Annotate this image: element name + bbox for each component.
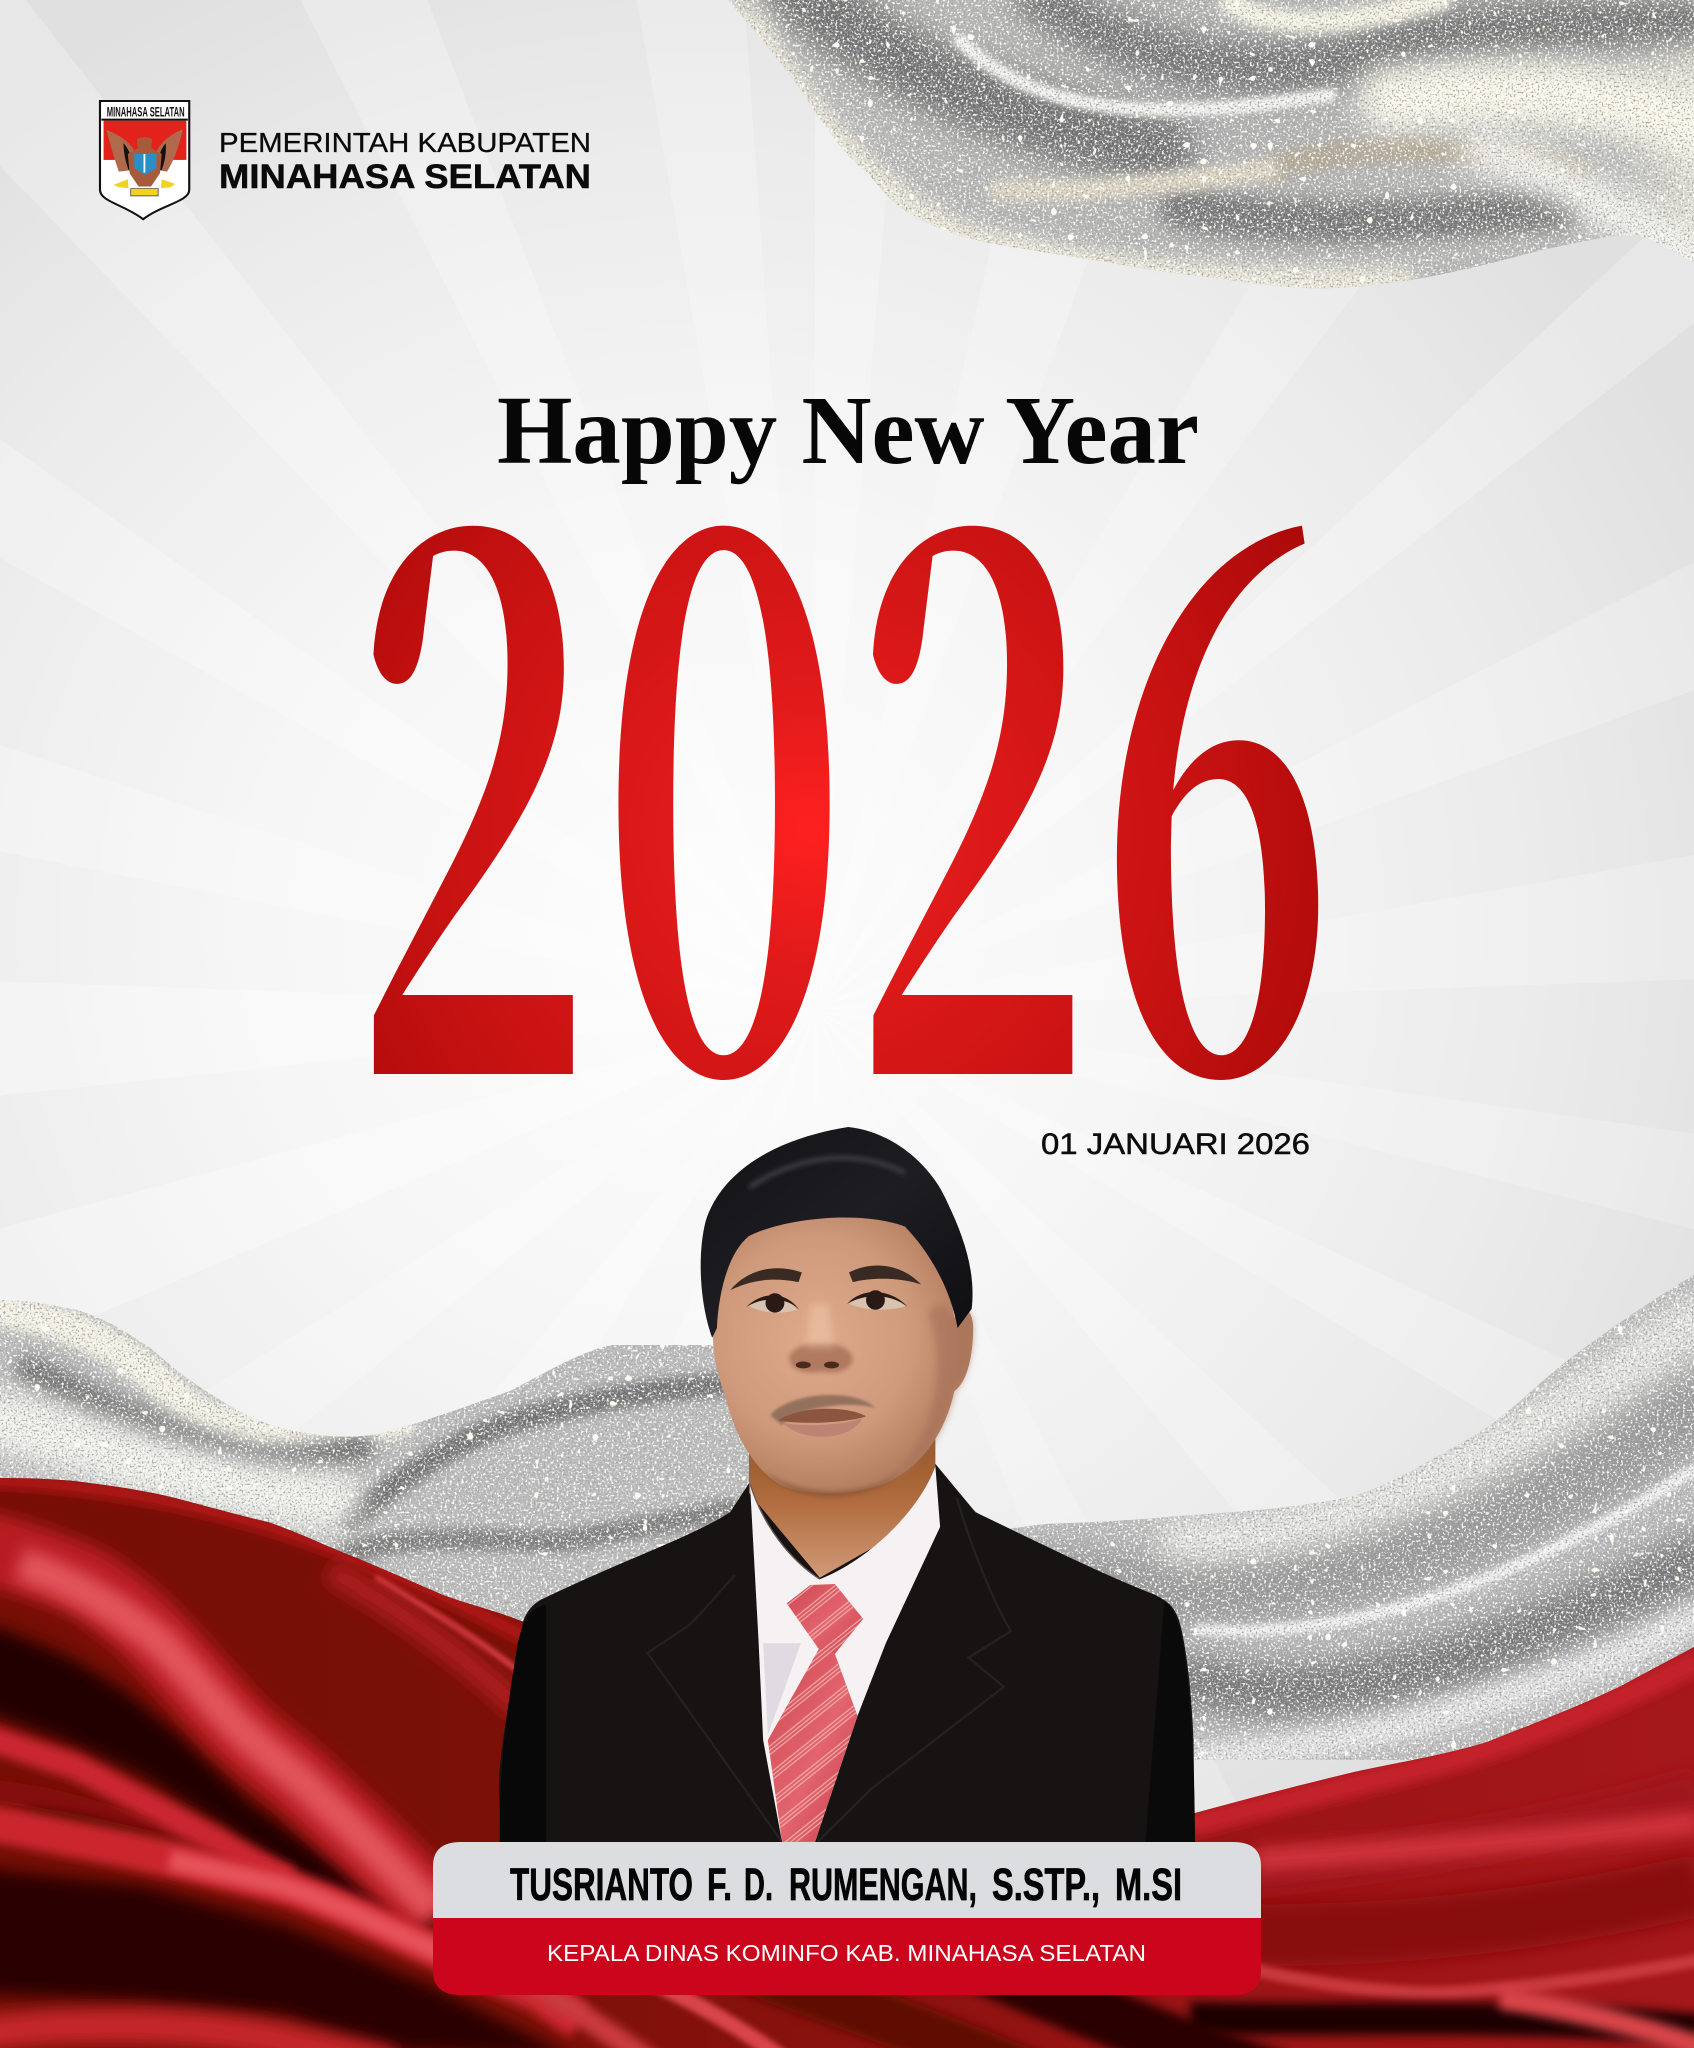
hair	[701, 1127, 973, 1338]
emblem: Minahasa Selatan shield logo	[100, 101, 189, 219]
banner: grey name plate	[433, 1842, 1261, 1918]
eyes	[749, 1297, 797, 1313]
title text: KEPALA DINAS KOMINFO KAB. MINAHASA SELATAN	[547, 1940, 1146, 1966]
banner: red title plate	[433, 1918, 1261, 1995]
big year: 2026: 2	[350, 209, 593, 1290]
moustache and mouth	[770, 1395, 875, 1425]
big year: 2026: 6	[1101, 211, 1335, 1281]
top edge sheen	[0, 1480, 530, 1640]
name text: TUSRIANTO	[510, 1859, 693, 1910]
name text: RUMENGAN,	[789, 1859, 977, 1910]
silver glitter wave: middle band	[0, 1270, 1694, 1770]
neck	[749, 1425, 935, 1578]
icon: eagle	[106, 129, 183, 196]
header text: institution name: MINAHASA SELATAN	[219, 158, 591, 196]
name text	[510, 1859, 1182, 1910]
emblem: Minahasa Selatan shield logo: MINAHASA SELATAN	[107, 105, 185, 120]
name text: D.	[744, 1859, 773, 1910]
red satin cloth	[0, 1470, 1694, 2048]
highlight 3	[0, 1822, 580, 2022]
big year: 2026: 2	[850, 209, 1092, 1290]
highlight 1	[0, 1546, 435, 1912]
header text: institution name: PEMERINTAH KABUPATEN	[219, 127, 591, 158]
header text: institution name	[219, 127, 591, 196]
name text: F.	[707, 1859, 732, 1910]
name text: S.STP.,	[992, 1859, 1100, 1910]
name text: M.SI	[1115, 1859, 1182, 1910]
date: 01 JANUARI 2026	[1041, 1128, 1310, 1161]
lapels	[648, 1498, 1011, 1842]
silver glitter wave: top right	[700, 0, 1694, 300]
big year: 2026	[350, 209, 1335, 1290]
shirt	[750, 1466, 940, 1842]
nose	[789, 1343, 853, 1373]
bottom strip folds	[652, 1995, 788, 2048]
highlight 2	[0, 1735, 290, 1880]
right side folds	[1190, 1660, 1694, 1825]
eyebrows	[730, 1268, 802, 1290]
portrait: man in black suit	[499, 1127, 1195, 1843]
highlight 4	[0, 2026, 393, 2048]
suit	[499, 1464, 1195, 1843]
big year: 2026: 0	[599, 211, 849, 1282]
tie	[768, 1584, 863, 1842]
heading: Happy New Year: Happy New Year	[497, 377, 1199, 484]
face	[713, 1195, 973, 1493]
shadow fold 2	[0, 1868, 580, 2048]
shadow fold 1	[0, 1628, 440, 1950]
name banner	[433, 1842, 1261, 1995]
mid band under highlight 2	[0, 1781, 161, 1832]
